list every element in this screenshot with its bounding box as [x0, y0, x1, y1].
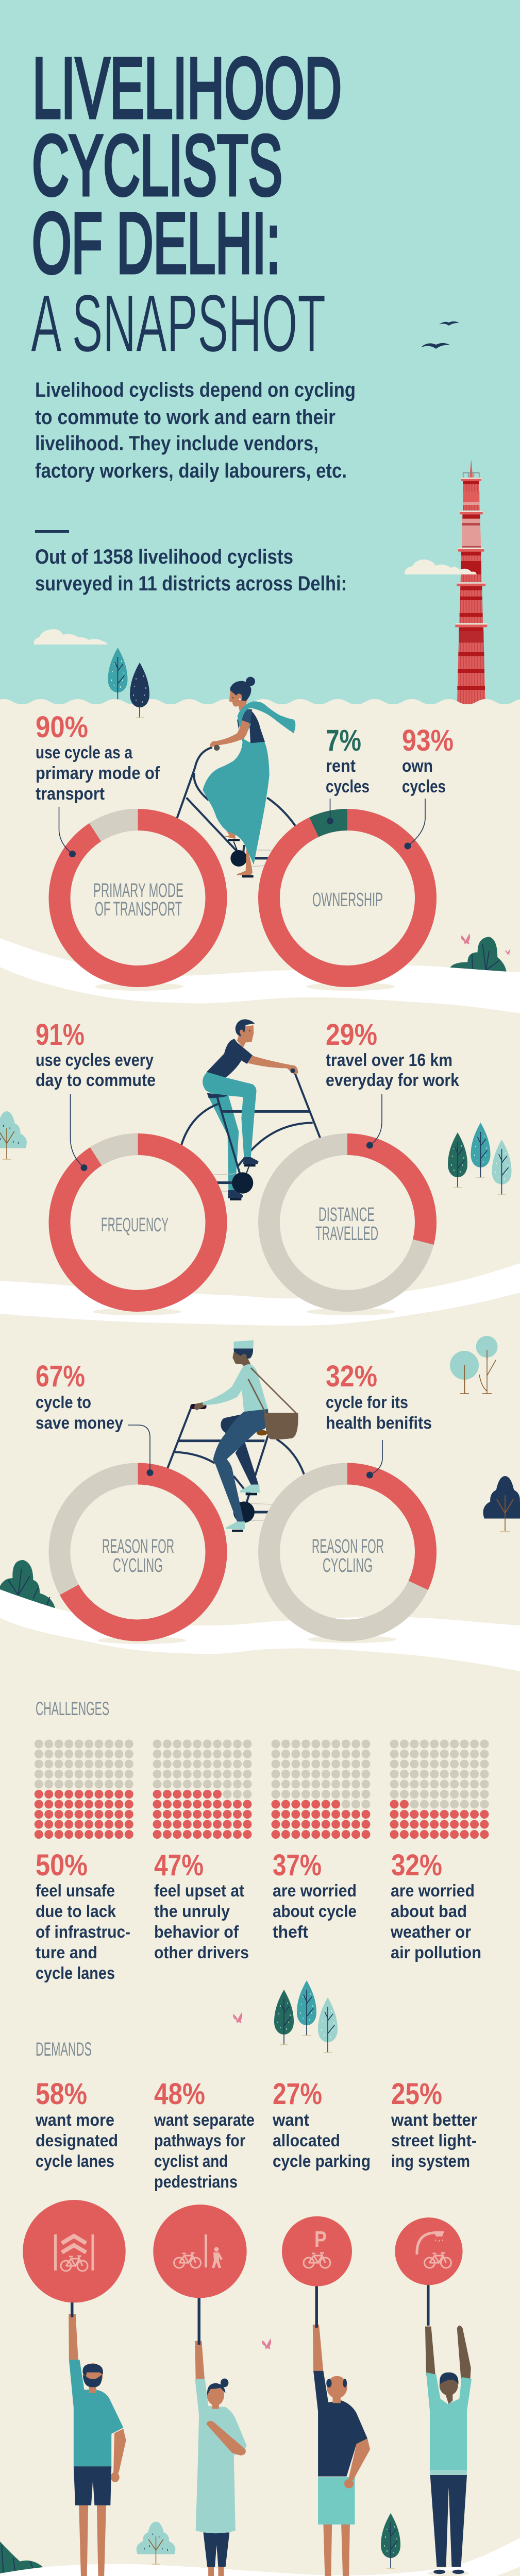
stat: 93%: 93% [402, 724, 454, 757]
challenge: 50% [36, 1849, 130, 1982]
challenge: 47%: feel upset at [154, 1881, 244, 1900]
stat: 91%: day to commute [36, 1071, 156, 1090]
survey sample text: surveyed in 11 districts across Delhi: [35, 572, 347, 595]
butterflies near road 1 [461, 934, 510, 955]
stat: 91%: use cycles every [36, 1050, 154, 1070]
cloud left [34, 629, 108, 645]
challenge: 50%: ture and [36, 1943, 97, 1962]
challenge: 47% [154, 1849, 249, 1962]
challenge: 47%: 47% [154, 1849, 204, 1882]
challenge: 37%: about cycle [273, 1902, 357, 1921]
butterfly [233, 2012, 242, 2023]
stat: 32%: cycle for its [326, 1393, 408, 1412]
stat: 7%: cycles [326, 777, 370, 796]
challenge: 47%: other drivers [154, 1943, 249, 1962]
demand: 25%: street light- [391, 2131, 477, 2150]
person: woman with pathway sign [194, 2341, 247, 2576]
stat: 7%: 7% [326, 724, 361, 757]
stat: 93%: own [402, 756, 433, 776]
donut: reason for cycling, health: REASON FOR [312, 1536, 384, 1557]
sign: cycle parking [282, 2216, 352, 2328]
donut: frequency [30, 1114, 246, 1331]
challenge: 50%: of infrastruc- [36, 1922, 130, 1941]
navy tree at horizon [130, 663, 149, 718]
demand: 27%: allocated [273, 2131, 340, 2150]
intro text: livelihood. They include vendors, [35, 432, 318, 455]
demand: 48% [154, 2077, 255, 2191]
round trees row 3 [450, 1336, 498, 1394]
heading: title: CYCLISTS [32, 118, 282, 213]
illustration: man cyclist [181, 1019, 321, 1200]
demand: 27%: want [272, 2110, 309, 2129]
person: bearded man with cycle lane sign [65, 2314, 126, 2576]
stat: 29% [326, 1018, 459, 1149]
stat: 32%: health benifits [326, 1413, 432, 1432]
stat: 67%: save money [36, 1413, 124, 1432]
survey sample text: Out of 1358 livelihood cyclists [35, 546, 293, 568]
donut: reason for cycling, save money: CYCLING [113, 1555, 163, 1577]
navy bush row 3 [483, 1476, 520, 1532]
stat: 90%: use cycle as a [36, 743, 133, 762]
stat: 67%: 67% [36, 1360, 85, 1393]
person: man with street lighting sign [425, 2326, 472, 2576]
sign: street lighting [395, 2217, 463, 2326]
challenge: 32%: air pollution [391, 1943, 481, 1962]
challenge: 32%: weather or [390, 1922, 471, 1941]
stat: 91% [36, 1018, 156, 1171]
demand: 25%: want better [391, 2110, 477, 2129]
demand: 48%: pedestrians [154, 2172, 238, 2191]
donut: distance travelled: DISTANCE [318, 1204, 375, 1226]
challenge: 47%: behavior of [154, 1922, 239, 1941]
trees right row 2 [448, 1123, 511, 1195]
trees mid-page [274, 1980, 338, 2053]
stat: 93% [402, 724, 454, 849]
sky [0, 0, 520, 707]
wheel shadows row 1 [95, 982, 395, 991]
wheel shadows row 2 [93, 1308, 395, 1315]
challenge: 37% [273, 1849, 357, 1941]
donut: primary mode of transport [29, 790, 246, 1006]
wheel shadows row 3 [98, 1636, 397, 1644]
donut: ownership: OWNERSHIP [312, 889, 383, 911]
demand: 27%: cycle parking [273, 2151, 371, 2171]
challenge: 50%: feel unsafe [36, 1881, 115, 1900]
demand: 48%: 48% [154, 2077, 205, 2111]
dot grid: 47% [157, 1744, 248, 1834]
section heading: demands: DEMANDS [36, 2039, 92, 2060]
illustration: cap cyclist [167, 1340, 304, 1532]
stat: 91%: 91% [36, 1018, 85, 1052]
intro text: factory workers, daily labourers, etc. [35, 460, 347, 482]
challenge: 37%: theft [273, 1922, 308, 1941]
donut: primary mode of transport: PRIMARY MODE [93, 880, 183, 902]
person: bald man with parking sign [310, 2325, 370, 2576]
road 4 [0, 2538, 520, 2576]
donut: distance travelled: TRAVELLED [315, 1223, 378, 1245]
donut: distance travelled [269, 1144, 426, 1301]
stat: 29%: travel over 16 km [326, 1050, 452, 1070]
demand: 25%: ing system [391, 2151, 470, 2171]
demand: 25%: 25% [391, 2077, 442, 2111]
stat: 93%: cycles [402, 777, 446, 796]
donut: reason for cycling, save money [60, 1473, 216, 1630]
stat: 67% [36, 1360, 154, 1476]
sign: separate pathways [153, 2205, 247, 2345]
demand: 25% [391, 2077, 477, 2171]
heading: title: OF DELHI: [32, 196, 280, 291]
stat: 90%: primary mode of [36, 764, 160, 783]
divider rule [35, 530, 69, 533]
stat: 67%: cycle to [36, 1393, 91, 1412]
demand: 48%: want separate [154, 2110, 255, 2129]
demand: 58%: 58% [36, 2077, 87, 2111]
bush behind road 1 [450, 937, 507, 977]
road 1 [0, 938, 520, 1013]
intro text: Livelihood cyclists depend on cycling [35, 379, 356, 401]
demand: 58% [35, 2077, 118, 2171]
dot grid: 37% [276, 1744, 366, 1834]
dot grid: 50% [39, 1744, 129, 1834]
illustration: Qutub Minar tower [455, 460, 487, 706]
dot grid: 32% [394, 1744, 485, 1834]
intro text [35, 379, 356, 482]
green bush row 3 [0, 1560, 56, 1618]
bush left row 2 [0, 1111, 27, 1160]
donut: reason for cycling, health [269, 1473, 426, 1630]
birds [421, 321, 459, 349]
heading: title [31, 41, 342, 369]
butterfly near signs [262, 2338, 271, 2349]
illustration: woman cyclist [177, 677, 295, 877]
bushes and tree behind road 4 [0, 2513, 400, 2576]
stat: 90%: transport [36, 784, 105, 804]
road 2 [0, 1263, 520, 1326]
stat: 32%: 32% [326, 1360, 377, 1393]
challenge: 37%: 37% [273, 1849, 322, 1882]
challenge: 32%: about bad [391, 1902, 467, 1921]
demand: 58%: designated [36, 2131, 118, 2150]
stat: 29%: 29% [326, 1018, 377, 1052]
stat: 32% [326, 1360, 432, 1479]
sign: more cycle lanes [23, 2200, 126, 2317]
stat: 90% [36, 710, 160, 857]
wavy ground edge [0, 699, 520, 721]
demand: 27%: 27% [273, 2077, 322, 2111]
challenge: 47%: the unruly [154, 1902, 230, 1921]
donut: reason for cycling, health: CYCLING [323, 1555, 373, 1577]
challenge: 32%: are worried [391, 1881, 475, 1900]
sign: cycle parking: P [314, 2227, 327, 2252]
challenge: 37%: are worried [273, 1881, 357, 1900]
stat: 7%: rent [326, 756, 356, 776]
challenge: 50%: 50% [36, 1849, 88, 1882]
demand: 58%: cycle lanes [36, 2151, 114, 2171]
stat: 90%: 90% [36, 710, 88, 744]
intro text: to commute to work and earn their [35, 406, 336, 429]
demand: 58%: want more [35, 2110, 114, 2129]
demand: 48%: pathways for [154, 2131, 245, 2150]
donut: ownership [243, 794, 451, 1002]
challenge: 50%: cycle lanes [36, 1963, 115, 1982]
donut: frequency: FREQUENCY [101, 1214, 169, 1236]
road 3 [0, 1589, 520, 1671]
cloud beside tower [405, 560, 477, 574]
trees on horizon [108, 648, 128, 703]
challenge: 32%: 32% [391, 1849, 442, 1882]
challenge: 50%: due to lack [36, 1902, 116, 1921]
donut: primary mode of transport: OF TRANSPORT [95, 899, 182, 920]
stat: 7% [326, 724, 370, 824]
survey sample text [35, 546, 347, 595]
challenge: 32% [390, 1849, 481, 1962]
demand: 48%: cyclist and [154, 2151, 228, 2171]
donut: reason for cycling, save money: REASON FOR [102, 1536, 174, 1557]
section heading: challenges: CHALLENGES [36, 1698, 109, 1719]
stat: 29%: everyday for work [326, 1071, 459, 1090]
demand: 27% [272, 2077, 371, 2171]
